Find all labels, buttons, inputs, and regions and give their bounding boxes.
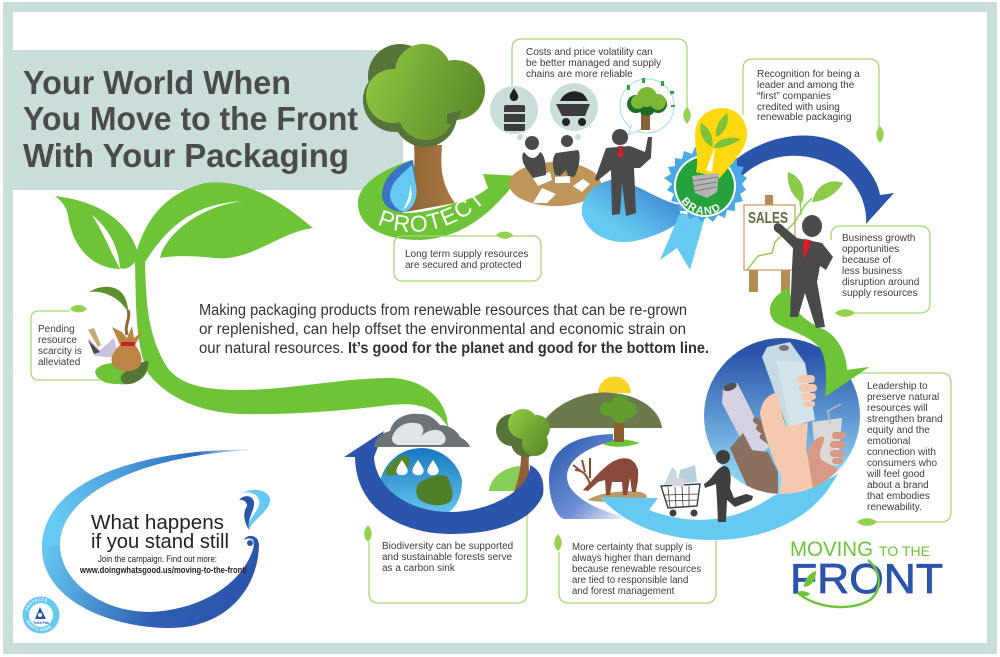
callout text: Pending [38,324,75,335]
label: brand: BRAND [681,196,720,215]
callout text: as a carbon sink [382,563,456,574]
callout text: leader and among the [757,80,855,91]
logo: moving to the front: TO THE [879,543,930,559]
callout text: Biodiversity can be supported [382,541,513,552]
callout text [757,69,860,123]
meeting table with seated people [490,83,601,206]
hand: brown [730,433,778,500]
arrow: brand dark blue [735,136,894,224]
title [23,64,358,174]
body text [199,302,709,357]
callout text: renewability. [867,502,922,513]
callout text: supply resources [842,288,918,299]
icon: leaf [70,305,87,312]
callout text: because of [842,255,891,266]
callout text: resources will [867,403,928,414]
sprout stem arrow with leaves [55,182,448,427]
small tree and hill [489,409,550,492]
callout text [382,541,513,574]
icon: leaf [835,309,855,317]
ribbon swoosh and tail [582,180,705,270]
logo: moving to the front: FRONT [790,555,943,602]
callout: more certainty [554,530,716,603]
thought bubble: coal cart [550,83,598,140]
callout text: consumers who [867,458,937,469]
title: You Move to the Front [23,100,358,137]
callout text: that embodies [867,491,930,502]
icon: leaf [496,232,513,239]
callout text: renewable packaging [757,112,852,123]
icon: cup [812,404,842,467]
callout text [526,47,661,80]
callout text: chains are more reliable [526,69,633,80]
label: protect: PROTECT [378,196,482,232]
campaign text: www.doingwhatsgood.us/moving-to-the-front/ [79,565,247,576]
hand: right [807,437,840,490]
speech bubble: tree [620,78,675,135]
callout: recognition [743,59,884,143]
callout text: “first” companies [757,91,831,102]
person standing with tree thought [595,78,675,216]
earth circle [380,448,462,520]
callout text: scarcity is [38,346,82,357]
callout text: are secured and protected [405,260,522,271]
callout text [572,542,701,597]
callout text [405,249,528,271]
callout text: Leadership to [867,381,928,392]
icon: water drop [382,160,416,212]
callout text: emotional [867,436,910,447]
tree trunk [400,145,455,213]
callout: leadership [857,373,951,526]
icon: leaf [857,518,877,526]
person at sales board [774,215,833,328]
arrow: protect [358,160,512,240]
icon: water drops [396,460,439,475]
callout text: More certainty that supply is [572,542,693,553]
callout text: opportunities [842,244,899,255]
campaign text: if you stand still [91,531,229,553]
callout: long term supply [394,232,541,281]
icon: leaf [876,126,884,143]
icon: leaf [554,534,562,551]
callout text: preserve natural [867,392,939,403]
callout: costs and price volatility [512,39,691,124]
tree with water drop [363,44,485,213]
callout text: Costs and price volatility can [526,47,653,58]
callout text: strengthen brand [867,414,943,425]
callout: pending resource scarcity [31,305,100,380]
callout text: Recognition for being a [757,69,860,80]
body text: or replenished, can help offset the environmental and economic strain on [199,321,686,338]
logo: tetra pak badge: Tetra Pak [33,621,49,625]
hand: peach [760,393,814,500]
callout text: equity and the [867,425,930,436]
callout text: connection with [867,447,936,458]
icon: seed bag with trowel and sprout [88,287,148,384]
arrow: cyan swoosh [600,473,838,540]
logo: moving to the front: MOVING [790,538,873,561]
icon: leaf [364,525,372,542]
arrow: green swoosh down [770,288,869,397]
callout text: be better managed and supply [526,58,661,69]
callout text: and forest management [572,586,675,597]
callout: business growth [831,226,930,317]
chart line with leaves [747,172,843,270]
icon: leaf [683,107,691,124]
logo: moving to the front [790,538,943,607]
callout text: credited with using [757,102,840,113]
person seated right [553,135,580,177]
person seated left [522,136,546,178]
hands with packaging circle [704,328,869,500]
body text: our natural resources. [199,340,344,357]
icon: cloud [374,414,470,447]
landscape: hill, sun, small tree [539,376,662,447]
callout text: are tied to responsible land [572,575,688,586]
sales board [744,172,843,292]
callout text [842,233,919,299]
callout text [866,381,943,513]
campaign text: Join the campaign. Find out more: [98,554,217,565]
callout text: Business growth [842,233,915,244]
callout text: less business [842,266,902,277]
icon: brand badge with light bulb [664,108,747,222]
icon: question mark [239,490,270,547]
callout text: disruption around [842,277,919,288]
callout text: because renewable resources [572,564,701,575]
callout text: alleviated [38,357,80,368]
thought bubble: oil barrel [490,86,538,140]
callout text: about a brand [867,480,929,491]
swirl with question mark [42,450,270,628]
callout text [38,324,82,368]
callout text: always higher than demand [572,553,690,564]
title panel [13,50,403,190]
icon: bottle [722,382,769,452]
title: Your World When [23,64,291,101]
logo: tetra pak badge [22,596,60,634]
icon: deer [573,458,647,502]
body text: It’s good for the planet and good for the bottom line. [348,340,709,357]
callout text: Long term supply resources [405,249,528,260]
callout: biodiversity [364,505,527,603]
icon: cart [661,465,700,516]
green arrow tip over circle [800,328,869,397]
arrow: dark blue around earth [344,431,543,534]
title: With Your Packaging [23,137,349,174]
campaign text: What happens [91,512,224,534]
logo: tetra pak badge: PROTECTS [25,598,47,611]
callout text: and sustainable forests serve [382,552,513,563]
icon: carton [762,342,815,427]
person pushing shopping cart [661,450,753,522]
callout text: will feel good [866,469,925,480]
body text: Making packaging products from renewable resources that can be re-grown [199,302,687,319]
river [549,434,632,519]
callout text: resource [38,335,77,346]
campaign text [79,512,247,576]
logo: tetra pak badge: WHAT'S GOOD [26,620,51,631]
label: sales: SALES [748,210,788,227]
